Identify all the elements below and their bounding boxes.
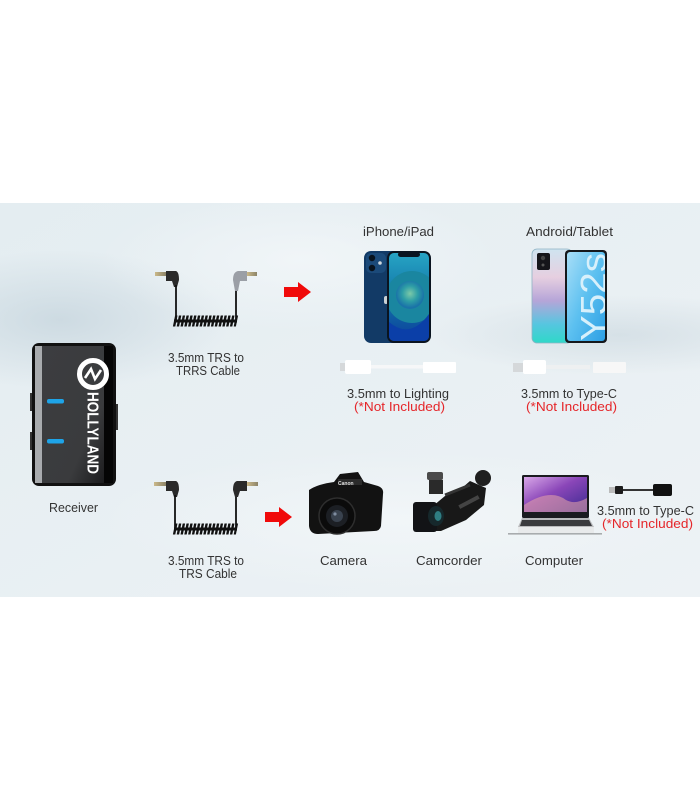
label: 3.5mm to Type-C, computer: 3.5mm to Type-C <box>597 504 694 518</box>
cable label: TRS to TRS: 3.5mm TRS to <box>168 554 244 568</box>
label: 3.5mm to Lightning <box>347 387 449 414</box>
icon: Android phone <box>532 249 614 343</box>
icon: laptop <box>508 475 602 535</box>
receiver device <box>30 343 118 486</box>
label: 3.5mm to Lightning: 3.5mm to Lighting <box>347 387 449 401</box>
adapter: 3.5mm to Lightning <box>340 360 456 374</box>
arrow: top row <box>284 282 311 302</box>
label: 3.5mm to Type-C, computer <box>597 504 694 531</box>
label: camcorder: Camcorder <box>416 554 482 568</box>
label: 3.5mm to Type-C <box>521 387 617 414</box>
icon: Android phone: Y52s <box>573 253 614 341</box>
label: camera: Camera <box>320 554 367 568</box>
LED indicators <box>47 399 64 444</box>
background band <box>0 190 700 597</box>
label: computer: Computer <box>525 554 583 568</box>
cable: TRS to TRS <box>154 481 258 529</box>
label: Android/Tablet: Android/Tablet <box>526 225 614 239</box>
icon: iPhone <box>364 251 438 343</box>
icon: camcorder <box>413 470 491 532</box>
label: 3.5mm to Type-C: 3.5mm to Type-C <box>521 387 617 401</box>
arrow: bottom row <box>265 507 292 527</box>
adapter: 3.5mm to Type-C <box>513 360 626 374</box>
cable label: TRS to TRRS: TRRS Cable <box>176 364 240 378</box>
cable: TRS to TRRS <box>155 271 257 321</box>
adapter: USB-C dongle <box>609 484 672 496</box>
cable label: TRS to TRS <box>168 554 244 581</box>
label: receiver: Receiver <box>49 501 98 515</box>
camera brand: Canon <box>338 481 354 487</box>
label: 3.5mm to Type-C, computer: (*Not Included) <box>602 517 693 531</box>
cable label: TRS to TRRS: 3.5mm TRS to <box>168 351 244 365</box>
cable label: TRS to TRRS <box>168 351 244 378</box>
brand wordmark: HOLLYLAND <box>84 392 100 474</box>
label: 3.5mm to Type-C: (*Not Included) <box>526 400 617 414</box>
label: 3.5mm to Lightning: (*Not Included) <box>354 400 445 414</box>
label: iPhone/iPad: iPhone/iPad <box>363 225 434 239</box>
icon: camera <box>309 472 383 534</box>
Hollyland logo <box>80 360 106 388</box>
cable label: TRS to TRS: TRS Cable <box>179 567 237 581</box>
